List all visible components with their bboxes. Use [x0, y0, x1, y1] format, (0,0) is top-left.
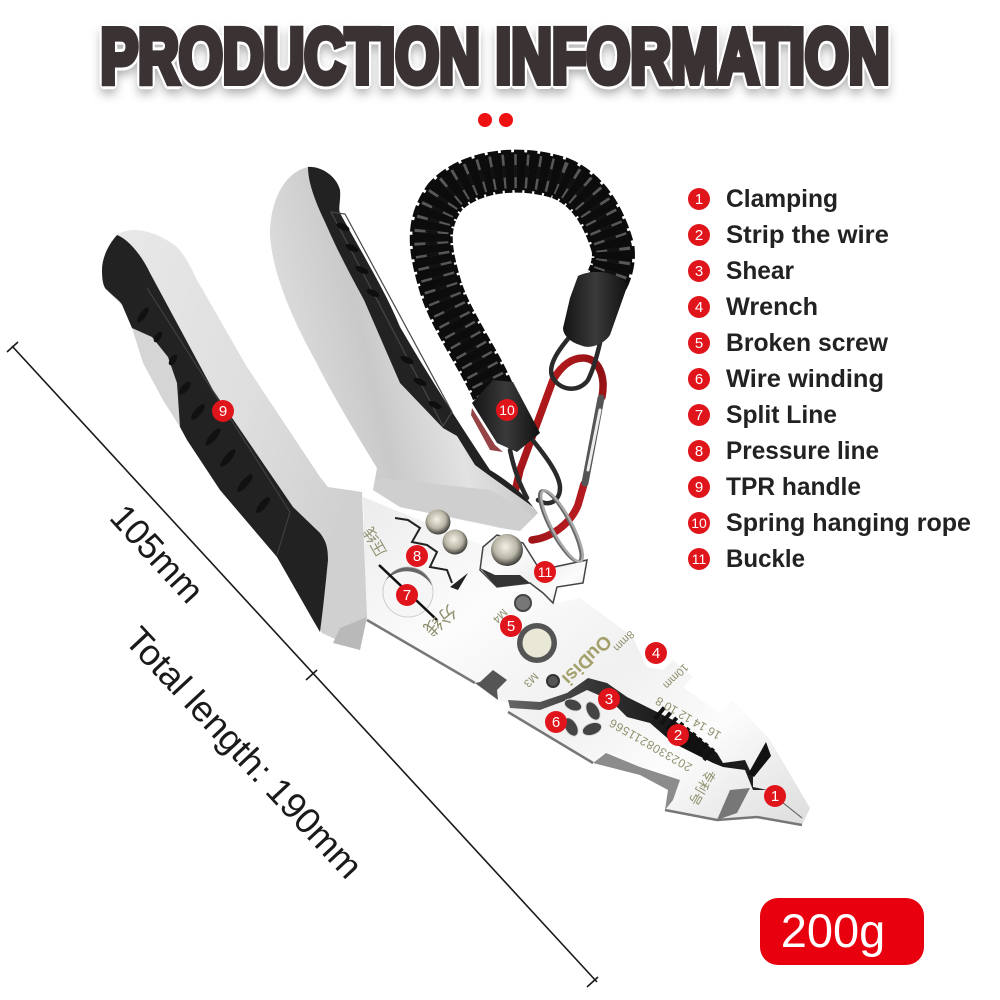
marker 4: 4	[652, 645, 660, 662]
blade engraved text: 10mm	[660, 661, 690, 691]
gap between jaws	[508, 678, 767, 790]
marker 8: 8	[413, 548, 421, 565]
legend item 4: 4	[695, 299, 703, 316]
crimp rivets	[426, 510, 450, 534]
legend item 7: 7	[695, 407, 703, 424]
side slot	[475, 670, 507, 700]
blade engraved text: 2023308211566	[606, 716, 694, 775]
blade engraved text: M3	[521, 670, 540, 689]
legend item 5: Broken screw	[726, 329, 889, 357]
marker 10: 10	[499, 402, 515, 418]
legend item 3: 3	[695, 263, 703, 280]
blade engraved text: 分线	[420, 601, 460, 639]
key ring	[532, 486, 590, 566]
blade engraved text: M4	[490, 606, 509, 625]
blade engraved text: 专利号	[686, 766, 718, 808]
marker 10	[496, 399, 518, 421]
legend item 6: 6	[695, 371, 703, 388]
blade engraved text: 8mm	[611, 628, 636, 654]
legend item 9: TPR handle	[726, 473, 861, 501]
buckle lever and pivot	[480, 534, 587, 603]
marker 2: 2	[674, 727, 682, 744]
winding holes	[561, 697, 603, 739]
legend item 11	[688, 545, 805, 573]
marker 8	[406, 545, 428, 567]
marker 6: 6	[552, 714, 560, 731]
legend item 10: 10	[691, 515, 707, 531]
marker 2	[667, 724, 689, 746]
legend item 11: Buckle	[726, 545, 805, 573]
blade engraved text: OuDisi	[557, 630, 615, 689]
legend item 5: 5	[695, 335, 703, 352]
dimension line	[7, 342, 598, 987]
legend item 1: 1	[695, 191, 703, 208]
legend item 8: Pressure line	[726, 437, 879, 465]
lower jaw facet	[717, 788, 750, 820]
dimension label: total length: Total length: 190mm	[117, 619, 371, 886]
rope end cylinders	[471, 272, 628, 452]
legend item 3: Shear	[726, 257, 794, 285]
blade engraved text: 压线	[361, 524, 390, 558]
legend item 11: 11	[692, 551, 706, 567]
marker 5: 5	[507, 618, 515, 635]
marker 11	[534, 561, 556, 583]
marker 3	[598, 688, 620, 710]
crimping teeth	[395, 518, 452, 583]
marker 11: 11	[538, 564, 552, 580]
marker 9: 9	[219, 403, 227, 420]
legend item 7: Split Line	[726, 401, 837, 429]
weight badge: 200g	[781, 904, 885, 957]
concave cut bevel	[593, 753, 680, 810]
legend item 8: 8	[695, 443, 703, 460]
marker 1	[764, 785, 786, 807]
legend item 9: 9	[695, 479, 703, 496]
marker 5	[500, 615, 522, 637]
legend item 2: 2	[695, 227, 703, 244]
weight badge	[760, 898, 924, 965]
blade engraved text	[361, 524, 724, 808]
decorative red dots	[478, 113, 513, 127]
marker 4	[645, 642, 667, 664]
spring rope coil	[431, 171, 613, 392]
legend item 3	[688, 257, 794, 285]
legend item 1: Clamping	[726, 185, 838, 213]
legend item 2: Strip the wire	[726, 221, 889, 249]
rope connector wires	[510, 333, 600, 503]
upper handle	[270, 167, 538, 531]
legend	[688, 185, 971, 573]
legend item 4: Wrench	[726, 293, 818, 321]
marker 3: 3	[605, 691, 613, 708]
marker 7: 7	[403, 587, 411, 604]
blade lower bevel edge	[367, 620, 802, 825]
number markers on pliers	[212, 399, 786, 807]
lower handle	[102, 230, 367, 650]
dimension label: 105mm: 105mm	[102, 496, 212, 611]
small screw holes	[515, 595, 531, 611]
wire stripping notches	[658, 712, 712, 757]
legend item 6: Wire winding	[726, 365, 884, 393]
marker 9	[212, 400, 234, 422]
marker 7	[396, 584, 418, 606]
pliers blade	[361, 497, 810, 825]
jaw dark facet	[748, 742, 771, 777]
marker 6	[545, 711, 567, 733]
legend item 10: Spring hanging rope	[726, 509, 971, 537]
marker 1: 1	[771, 788, 779, 805]
main pivot	[517, 623, 557, 663]
hole for split line	[383, 567, 433, 617]
blade engraved text: 16 14 12 10 8	[653, 694, 724, 743]
carabiner	[512, 358, 603, 540]
